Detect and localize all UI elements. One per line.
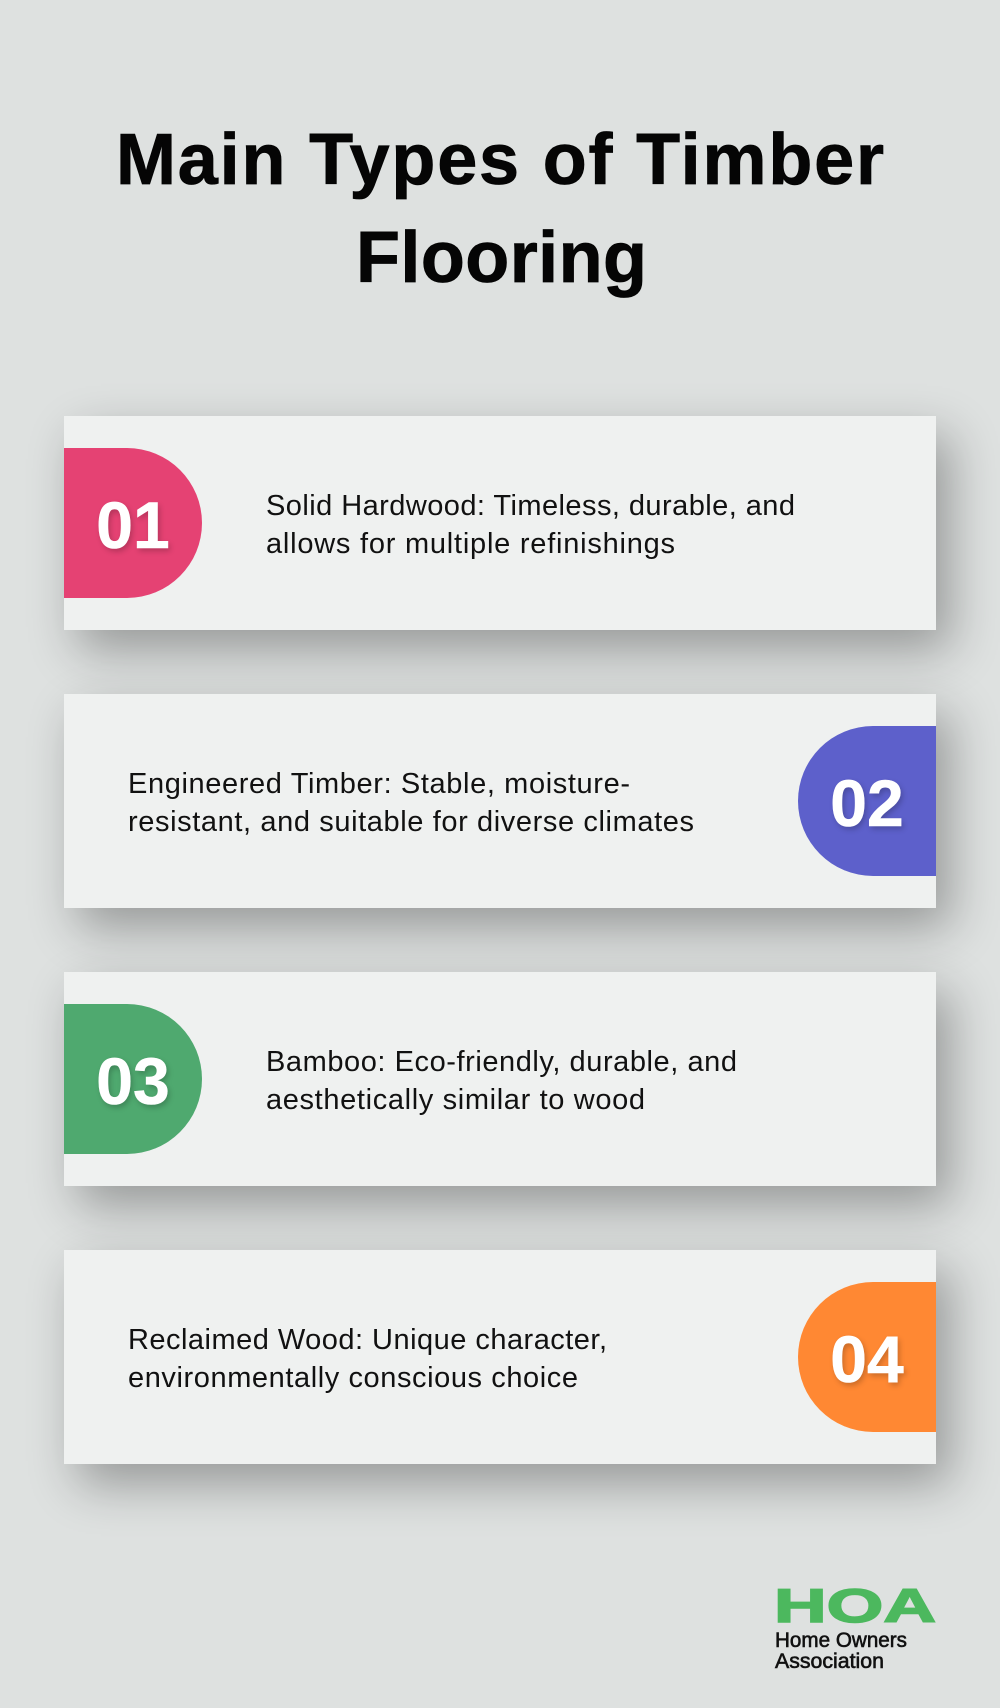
badge: 01 <box>64 448 202 598</box>
badge: 03: 03 <box>96 1044 170 1118</box>
panel: bamboo <box>64 972 936 1186</box>
text: reclaimed wood: environmentally conscious choice <box>128 1362 578 1394</box>
panel: reclaimed wood <box>64 1250 936 1464</box>
text: bamboo: aesthetically similar to wood <box>266 1084 645 1116</box>
text: reclaimed wood <box>128 1324 607 1394</box>
text: engineered timber: Engineered Timber: Stable, moisture- <box>128 768 630 800</box>
text: bamboo <box>266 1046 737 1116</box>
badge: 01: 01 <box>96 488 170 562</box>
logo: HOA Home Owners Association <box>774 1580 936 1673</box>
badge: 04: 04 <box>830 1322 904 1396</box>
text: bamboo: Bamboo: Eco-friendly, durable, and <box>266 1046 737 1078</box>
badge: 03 <box>64 1004 202 1154</box>
title <box>116 120 884 298</box>
badge: 02: 02 <box>830 766 904 840</box>
text: solid hardwood: Solid Hardwood: Timeless, durable, and <box>266 490 795 522</box>
title: Flooring <box>356 218 647 298</box>
text: engineered timber <box>128 768 694 838</box>
title: Main Types of Timber <box>116 120 884 200</box>
panel: solid hardwood <box>64 416 936 630</box>
text: reclaimed wood: Reclaimed Wood: Unique character, <box>128 1324 607 1356</box>
text: solid hardwood <box>266 490 795 560</box>
logo: HOA Home Owners Association: HOA <box>774 1580 936 1632</box>
logo: HOA Home Owners Association: Home Owners <box>775 1629 907 1652</box>
badge: 02 <box>798 726 936 876</box>
panel: engineered timber <box>64 694 936 908</box>
text: engineered timber: resistant, and suitable for diverse climates <box>128 806 694 838</box>
text: solid hardwood: allows for multiple refinishings <box>266 528 675 560</box>
badge: 04 <box>798 1282 936 1432</box>
logo: HOA Home Owners Association: Association <box>775 1650 884 1673</box>
